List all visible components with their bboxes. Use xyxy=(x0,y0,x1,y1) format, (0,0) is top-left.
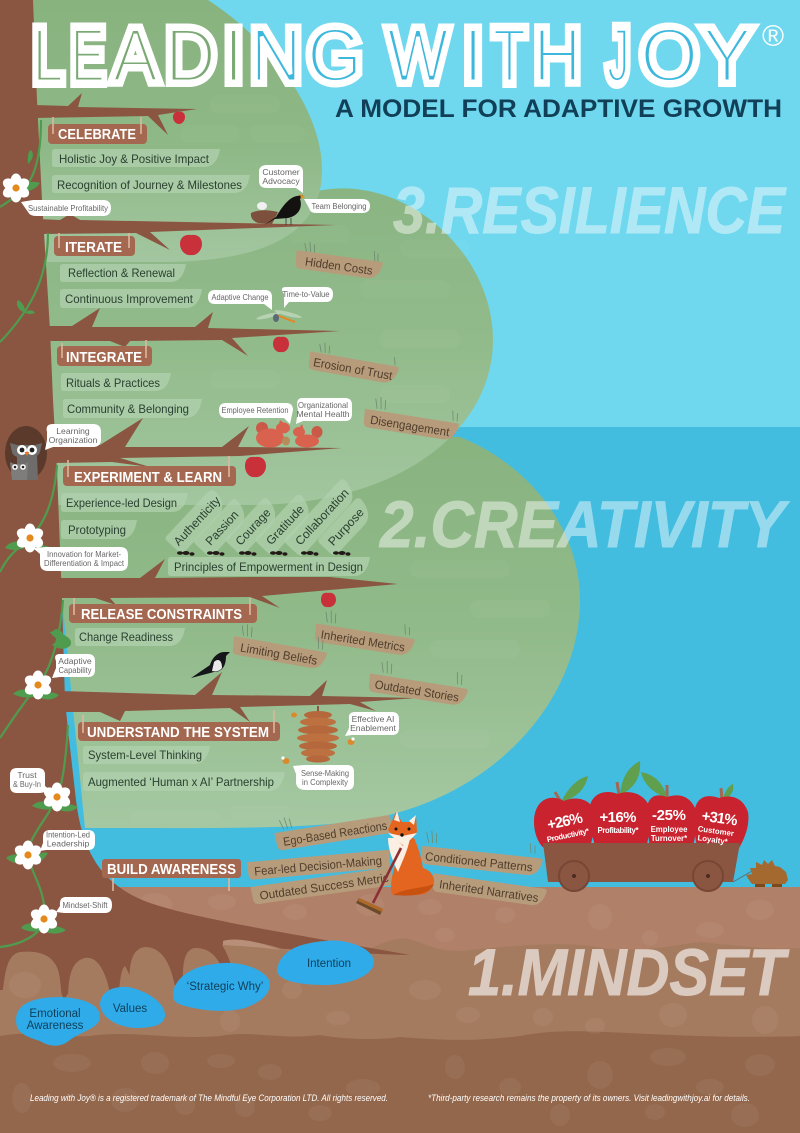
branch 2 xyxy=(38,214,336,250)
callout: effective ai enablement xyxy=(345,712,399,736)
registered mark: ® xyxy=(762,20,784,53)
title inline strokes on blue: N xyxy=(250,13,302,98)
principle: authenticity: Authenticity xyxy=(171,494,223,548)
callout: adaptive capability: Adaptive xyxy=(58,656,92,666)
soil top layer xyxy=(0,887,800,1133)
header: integrate xyxy=(57,340,152,366)
title white letter bodies: N xyxy=(250,13,302,98)
title inline strokes on blue: T xyxy=(493,12,526,98)
root pockets xyxy=(0,941,300,1010)
principle: courage: Courage xyxy=(233,506,274,548)
label: ego-based reactions xyxy=(272,801,393,851)
flower: adaptive capability xyxy=(13,670,59,700)
header: release constraints: RELEASE CONSTRAINTS xyxy=(81,607,242,623)
title inline strokes on green xyxy=(32,13,244,99)
label: outdated success metric: Outdated Success Metric xyxy=(259,871,389,903)
broom xyxy=(356,848,401,915)
metric: employee turnover: Employee xyxy=(651,825,688,834)
root fingertips xyxy=(0,985,240,1040)
principle: collaboration: Collaboration xyxy=(292,486,352,548)
principle: passion: Passion xyxy=(203,508,241,548)
blob: strategic why xyxy=(173,963,270,1011)
label: disengagement: Disengagement xyxy=(369,413,451,439)
soil pebbles lower xyxy=(9,972,778,1127)
label: conditioned patterns xyxy=(420,830,545,876)
text: reflection: Reflection & Renewal xyxy=(68,266,175,280)
bird and nest xyxy=(251,194,305,225)
title white letter bodies: D xyxy=(165,13,216,98)
metric: productivity: +26% xyxy=(546,810,584,834)
header: iterate xyxy=(54,233,135,256)
metric: employee turnover: -25% xyxy=(652,807,686,824)
metric: customer loyalty: Loyalty* xyxy=(697,833,729,846)
callout: time-to-value: Time-to-Value xyxy=(282,289,330,299)
header: celebrate: CELEBRATE xyxy=(58,127,136,143)
title white letter bodies: H xyxy=(534,14,581,99)
callout: learning organization: Organization xyxy=(49,435,98,445)
callout: trust and buy-in: & Buy-In xyxy=(13,779,41,789)
canopy lobe: top xyxy=(30,0,322,262)
header: build awareness xyxy=(102,859,241,891)
text: augmented partnership: Augmented ‘Human x AI’ Partnership xyxy=(88,775,274,789)
title inline strokes on green: A xyxy=(112,14,159,98)
principle: gratitude xyxy=(254,493,316,557)
callout: mindset-shift: Mindset-Shift xyxy=(62,900,108,910)
callout: trust and buy-in: Trust xyxy=(17,770,37,780)
blob: values xyxy=(100,987,165,1028)
flower: sustainable profitability xyxy=(1,174,40,202)
callout: time-to-value xyxy=(282,287,333,308)
callout: adaptive capability xyxy=(52,654,95,678)
soil bottom layer xyxy=(0,1031,800,1133)
blob: values: Values xyxy=(113,1003,147,1015)
principle: authenticity xyxy=(164,488,229,555)
text: continuous improvement: Continuous Improvement xyxy=(65,292,194,306)
callout: adaptive change xyxy=(208,290,272,310)
callout: employee retention: Employee Retention xyxy=(222,405,289,415)
text: principles of empowerment: Principles of Empowerment in Design xyxy=(174,560,363,574)
blob: emotional awareness xyxy=(16,997,100,1046)
text: prototyping: Prototyping xyxy=(68,523,126,537)
callout: intention-led leadership: Leadership xyxy=(47,838,89,848)
text: change readiness: Change Readiness xyxy=(79,630,173,644)
bees xyxy=(281,712,355,764)
title inline strokes on blue: W xyxy=(387,14,449,99)
flower: innovation xyxy=(5,524,52,552)
principle: purpose xyxy=(317,497,376,557)
title inline strokes on blue: H xyxy=(534,14,581,99)
dragonfly xyxy=(256,309,302,322)
apple: employee turnover xyxy=(641,772,697,850)
label: fear-led decision-making: Fear-led Decision-Making xyxy=(254,853,382,879)
text: system-level thinking: System-Level Thinking xyxy=(88,748,202,762)
title white letter bodies: I xyxy=(462,14,484,98)
apple: customer loyalty xyxy=(694,784,748,850)
metric: profitability: Profitability* xyxy=(598,826,639,835)
soil pebbles top xyxy=(138,893,774,946)
title inline strokes on blue: O xyxy=(640,14,699,99)
callout: mindset-shift xyxy=(56,897,112,913)
principle: gratitude: Gratitude xyxy=(263,502,307,548)
callout: effective ai enablement: Effective AI xyxy=(352,714,394,724)
branch 6 xyxy=(60,672,417,722)
callout: adaptive capability: Capability xyxy=(58,665,92,675)
blob: intention: Intention xyxy=(307,958,351,970)
metric: customer loyalty xyxy=(696,807,739,847)
label: outdated stories xyxy=(367,659,470,707)
text: prototyping xyxy=(61,520,137,539)
callout: adaptive change: Adaptive Change xyxy=(212,292,269,302)
branch 5 xyxy=(56,559,398,608)
text: holistic joy: Holistic Joy & Positive Impact xyxy=(59,152,210,166)
callout: team belonging: Team Belonging xyxy=(312,201,367,211)
text: community xyxy=(63,399,202,418)
callout: team belonging xyxy=(304,199,370,213)
title inline strokes on green: I xyxy=(223,14,244,98)
owls xyxy=(5,426,47,480)
vines xyxy=(0,120,68,947)
callout: customer advocacy xyxy=(259,165,303,193)
label: ego-based reactions: Ego-Based Reactions xyxy=(282,819,388,849)
callout: intention-led leadership: Intention-Led xyxy=(46,830,90,840)
header: understand the system xyxy=(78,710,280,741)
label: disengagement xyxy=(362,395,461,441)
canopy leaf texture xyxy=(130,95,550,824)
branch 3 xyxy=(48,308,340,356)
ants carrying principles xyxy=(177,551,350,556)
callout: sense-making in complexity: Sense-Making xyxy=(301,768,349,778)
blob: intention xyxy=(277,940,374,985)
metric: employee turnover xyxy=(651,807,688,843)
metric: productivity xyxy=(542,809,591,844)
hedgehog xyxy=(733,860,788,887)
label: outdated stories: Outdated Stories xyxy=(374,677,460,705)
text: rituals: Rituals & Practices xyxy=(66,376,160,390)
header: experiment and learn: EXPERIMENT & LEARN xyxy=(74,470,222,486)
title xyxy=(32,12,752,99)
magpie xyxy=(191,652,230,678)
callout: customer advocacy: Customer xyxy=(262,167,300,177)
title white letter bodies: G xyxy=(307,12,363,98)
title inline strokes on green: E xyxy=(70,13,105,98)
apple: profitability xyxy=(589,761,651,850)
callout: employee retention xyxy=(219,403,293,424)
branch 1 xyxy=(35,93,197,135)
sky lower xyxy=(0,427,800,897)
title inline strokes on blue xyxy=(250,12,752,99)
apple: productivity xyxy=(534,776,596,850)
text: community: Community & Belonging xyxy=(67,402,189,416)
branch 4 xyxy=(52,418,342,467)
callout: organizational mental health: Organizational xyxy=(298,400,348,410)
title inline strokes on blue: Y xyxy=(702,14,752,99)
text: continuous improvement xyxy=(60,289,202,308)
callout: sense-making in complexity xyxy=(293,765,354,790)
vine leaves xyxy=(17,150,71,649)
trunk and roots xyxy=(0,0,410,1000)
callout: customer advocacy: Advocacy xyxy=(262,176,300,186)
metric: customer loyalty: Customer xyxy=(697,824,734,838)
header: understand the system: UNDERSTAND THE SYSTEM xyxy=(87,725,269,741)
title white letter bodies xyxy=(32,12,752,99)
callout: innovation: Innovation for Market- xyxy=(47,549,121,559)
footer: trademark: Leading with Joy® is a registered trademark of The Mindful Eye Corporation LTD. All rights reserved. xyxy=(30,1093,388,1103)
label: erosion of trust xyxy=(307,340,401,385)
apples on branches xyxy=(173,112,336,607)
callout: learning organization xyxy=(45,424,101,450)
label: erosion of trust: Erosion of Trust xyxy=(312,355,394,383)
text: experience-led design: Experience-led Design xyxy=(66,496,177,510)
header: integrate: INTEGRATE xyxy=(66,350,142,366)
label: inherited metrics: Inherited Metrics xyxy=(320,627,406,655)
principle: purpose: Purpose xyxy=(325,505,367,549)
callout: innovation: Differentiation & Impact xyxy=(44,558,125,568)
callout: sense-making in complexity: in Complexity xyxy=(302,777,349,787)
flower: mindset-shift xyxy=(21,904,66,934)
soil middle layer xyxy=(0,938,800,1133)
callout: organizational mental health xyxy=(296,398,352,424)
cart xyxy=(543,843,740,891)
callout: trust and buy-in xyxy=(10,768,50,793)
flower: intention-led xyxy=(6,840,48,870)
beehive xyxy=(297,706,339,762)
title white letter bodies: O xyxy=(640,14,699,99)
title inline strokes on green: L xyxy=(32,14,63,99)
title white letter bodies: L xyxy=(32,14,63,99)
header: iterate: ITERATE xyxy=(65,240,122,256)
empowerment principles xyxy=(164,478,376,558)
callout: organizational mental health: Mental Health xyxy=(296,409,350,419)
principle: collaboration xyxy=(283,478,360,557)
title white letter bodies: W xyxy=(387,14,449,99)
title white letter bodies: J xyxy=(607,14,630,98)
label: hidden costs xyxy=(294,240,384,280)
label: limiting beliefs: Limiting Beliefs xyxy=(239,640,318,668)
principle: courage xyxy=(224,497,283,556)
title white letter bodies: Y xyxy=(702,14,752,99)
canopy lobe: resilience lower xyxy=(40,188,493,505)
label: conditioned patterns: Conditioned Patterns xyxy=(424,849,533,874)
metric: customer loyalty: +31% xyxy=(701,808,739,829)
text: recognition: Recognition of Journey & Milestones xyxy=(57,178,242,192)
metric: productivity: Productivity* xyxy=(546,826,591,844)
label: limiting beliefs xyxy=(231,622,330,670)
header: release constraints xyxy=(69,598,257,623)
metric: profitability: +16% xyxy=(600,809,636,826)
footer: research note: *Third-party research remains the property of its owners. Visit leadingwithjoy.ai for details. xyxy=(428,1093,750,1103)
blob: strategic why: ‘Strategic Why’ xyxy=(187,981,263,993)
subtitle: A MODEL FOR ADAPTIVE GROWTH xyxy=(335,95,782,123)
flower: trust xyxy=(32,782,78,812)
title white letter bodies: T xyxy=(493,12,526,98)
label: inherited narratives: Inherited Narratives xyxy=(438,877,539,905)
metric: profitability xyxy=(598,809,639,835)
label: hidden costs: Hidden Costs xyxy=(304,254,373,278)
label: inherited metrics xyxy=(313,609,417,657)
title white letter bodies: I xyxy=(223,14,244,98)
callout: effective ai enablement: Enablement xyxy=(350,723,397,733)
title inline strokes on blue: I xyxy=(462,14,484,98)
header: experiment and learn xyxy=(63,456,236,486)
callout: sustainable profitability xyxy=(21,200,111,216)
fox xyxy=(388,811,434,896)
header: celebrate xyxy=(48,117,147,144)
title inline strokes on blue: G xyxy=(307,12,363,98)
title inline strokes on blue: J xyxy=(607,14,630,98)
callout: innovation xyxy=(33,547,128,571)
principle: passion xyxy=(193,498,252,558)
callout: intention-led leadership xyxy=(40,830,95,851)
blob: emotional awareness: Awareness xyxy=(27,1020,84,1032)
squirrels xyxy=(256,420,322,448)
canopy lobe: creativity xyxy=(45,430,580,828)
title white letter bodies: A xyxy=(112,14,159,98)
blob: emotional awareness: Emotional xyxy=(29,1008,81,1020)
title inline strokes on green: D xyxy=(165,13,216,98)
root pocket highlight xyxy=(223,940,280,950)
header: build awareness: BUILD AWARENESS xyxy=(107,862,236,878)
sky upper xyxy=(0,0,800,428)
callout: learning organization: Learning xyxy=(56,426,90,436)
metric: employee turnover: Turnover* xyxy=(651,834,688,843)
title white letter bodies: E xyxy=(70,13,105,98)
callout: sustainable profitability: Sustainable Profitability xyxy=(28,203,109,213)
